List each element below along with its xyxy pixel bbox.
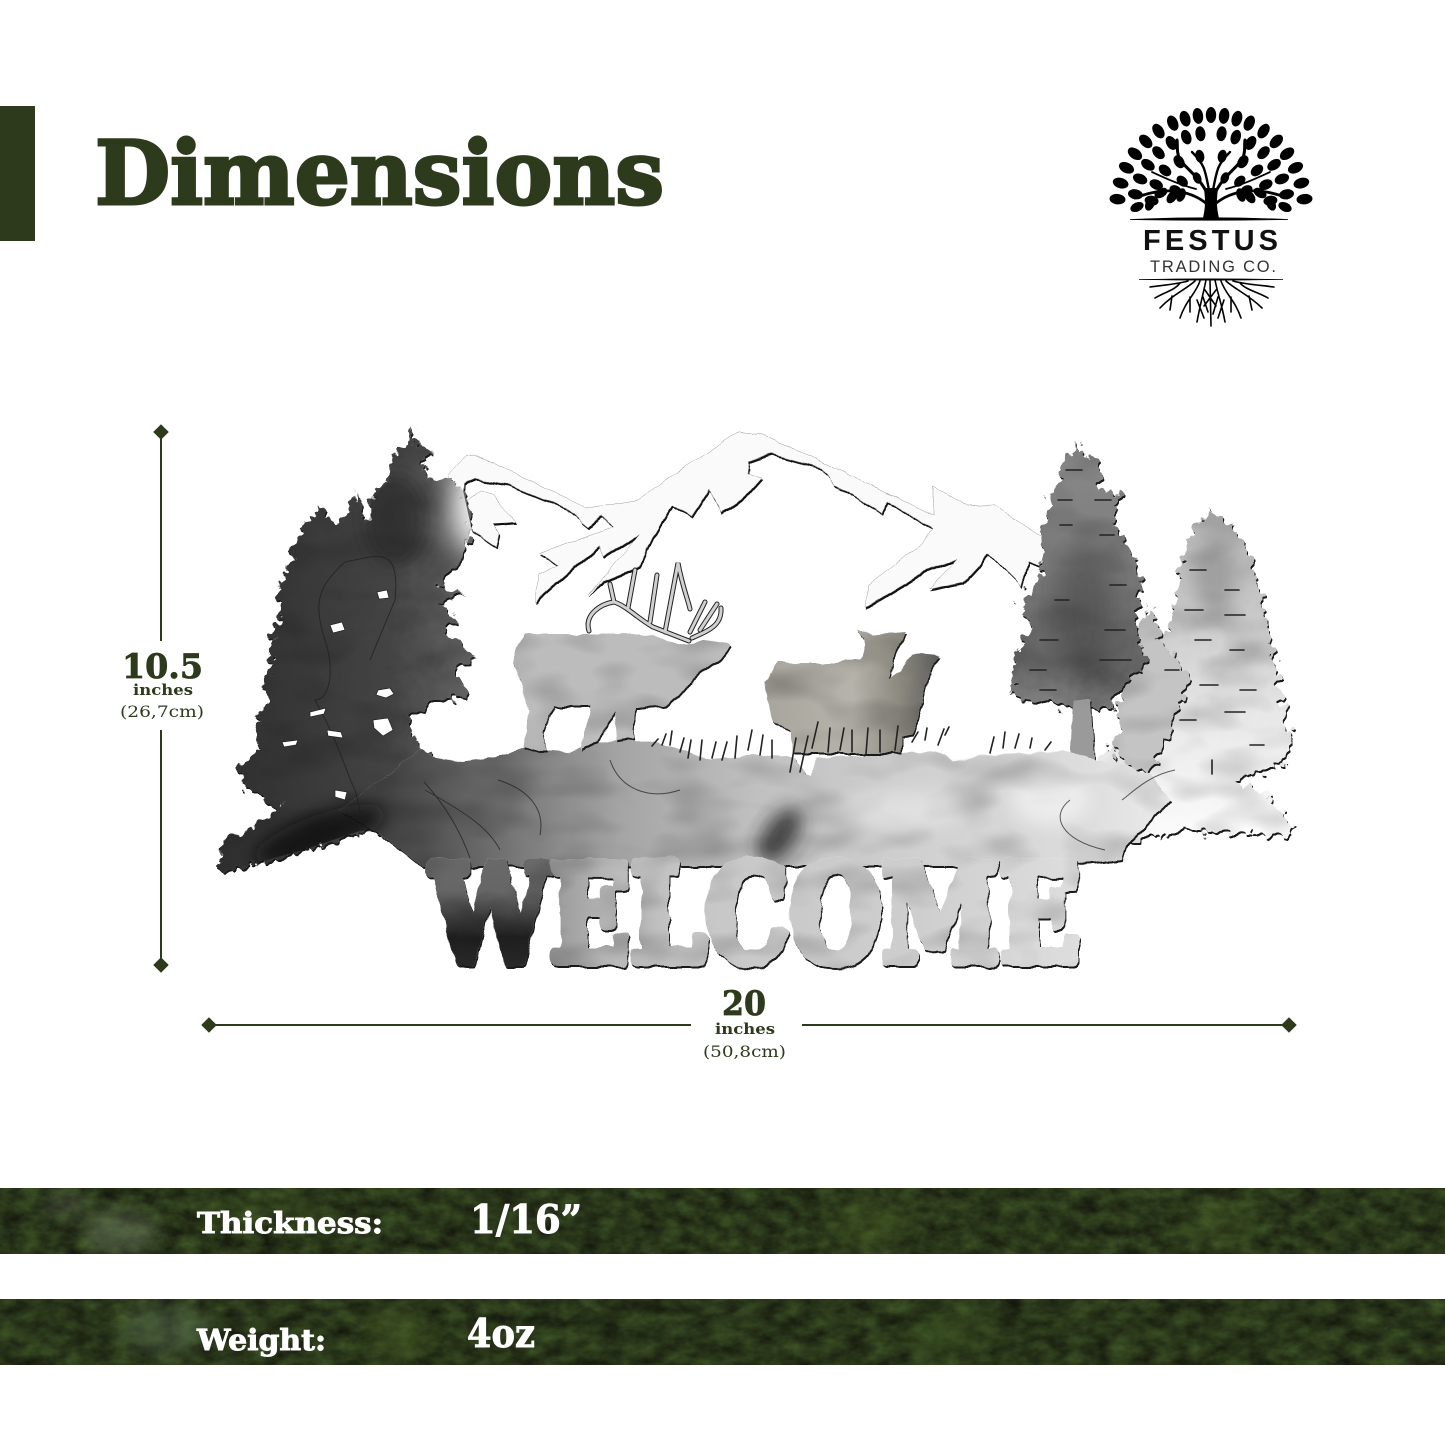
value: thickness: 1/16” bbox=[470, 1197, 582, 1243]
elk antlers bbox=[588, 563, 721, 641]
sign: tree branch marks bbox=[1030, 470, 1264, 774]
vertical dimension: height bbox=[120, 424, 204, 973]
sign: left trees bbox=[217, 425, 480, 869]
panel: thickness band bbox=[0, 1188, 1445, 1254]
heading accent block bbox=[0, 106, 35, 241]
dimension end marker bottom bbox=[153, 957, 169, 973]
sign: right tree (dark) bbox=[1010, 441, 1144, 709]
icon: tree roots bbox=[1150, 280, 1274, 326]
sign: grass bbox=[652, 722, 1051, 772]
icon: tree leaves bbox=[1109, 107, 1313, 214]
horizontal dimension: width bbox=[201, 984, 1297, 1061]
sign: mountain range bbox=[447, 432, 1053, 607]
icon: tree trunk and branches bbox=[1135, 140, 1287, 218]
horizontal dimension line bbox=[209, 1024, 1289, 1026]
value: weight: 4oz bbox=[467, 1311, 535, 1357]
sign: tree trunk bbox=[1070, 700, 1095, 764]
sign: small middle tree bbox=[1113, 607, 1190, 773]
sign: tree cutouts bbox=[282, 590, 394, 800]
logo lower divider bbox=[1139, 279, 1283, 280]
sign: bull elk bbox=[514, 563, 730, 750]
logo: Festus Trading Co. bbox=[1109, 107, 1313, 326]
width unit: inches bbox=[715, 1021, 775, 1038]
width value: 20 bbox=[722, 984, 766, 1024]
sign: two does bbox=[765, 628, 940, 753]
height unit: inches bbox=[133, 682, 193, 699]
logo upper divider bbox=[1130, 218, 1288, 220]
logo wordmark: Trading Co.: TRADING CO. bbox=[1150, 258, 1276, 276]
logo wordmark: FESTUS: FESTUS bbox=[1143, 225, 1278, 257]
height metric: (26,7cm) bbox=[120, 703, 204, 721]
elk body bbox=[514, 634, 730, 750]
title: Dimensions bbox=[95, 121, 664, 225]
dimension end marker left bbox=[201, 1017, 217, 1033]
sign: etched crack lines bbox=[315, 556, 1175, 858]
forest texture background bbox=[0, 1299, 1445, 1365]
label: thickness: Thickness: bbox=[197, 1206, 383, 1240]
dimension end marker top bbox=[153, 424, 169, 440]
height value: 10.5 bbox=[122, 647, 203, 687]
label: weight: Weight: bbox=[196, 1323, 326, 1357]
sign: shading on metal bbox=[247, 457, 1237, 878]
width metric: (50,8cm) bbox=[703, 1043, 786, 1061]
sign: ground bbox=[340, 740, 1170, 866]
panel: weight band bbox=[0, 1299, 1445, 1365]
sign: WELCOME lettering: WELCOME bbox=[428, 835, 1080, 993]
vertical dimension line bbox=[160, 432, 162, 965]
forest texture background bbox=[0, 1188, 1445, 1254]
product: metal welcome sign bbox=[217, 425, 1294, 993]
dimension end marker right bbox=[1281, 1017, 1297, 1033]
sign: right tree (light) bbox=[1080, 508, 1294, 845]
